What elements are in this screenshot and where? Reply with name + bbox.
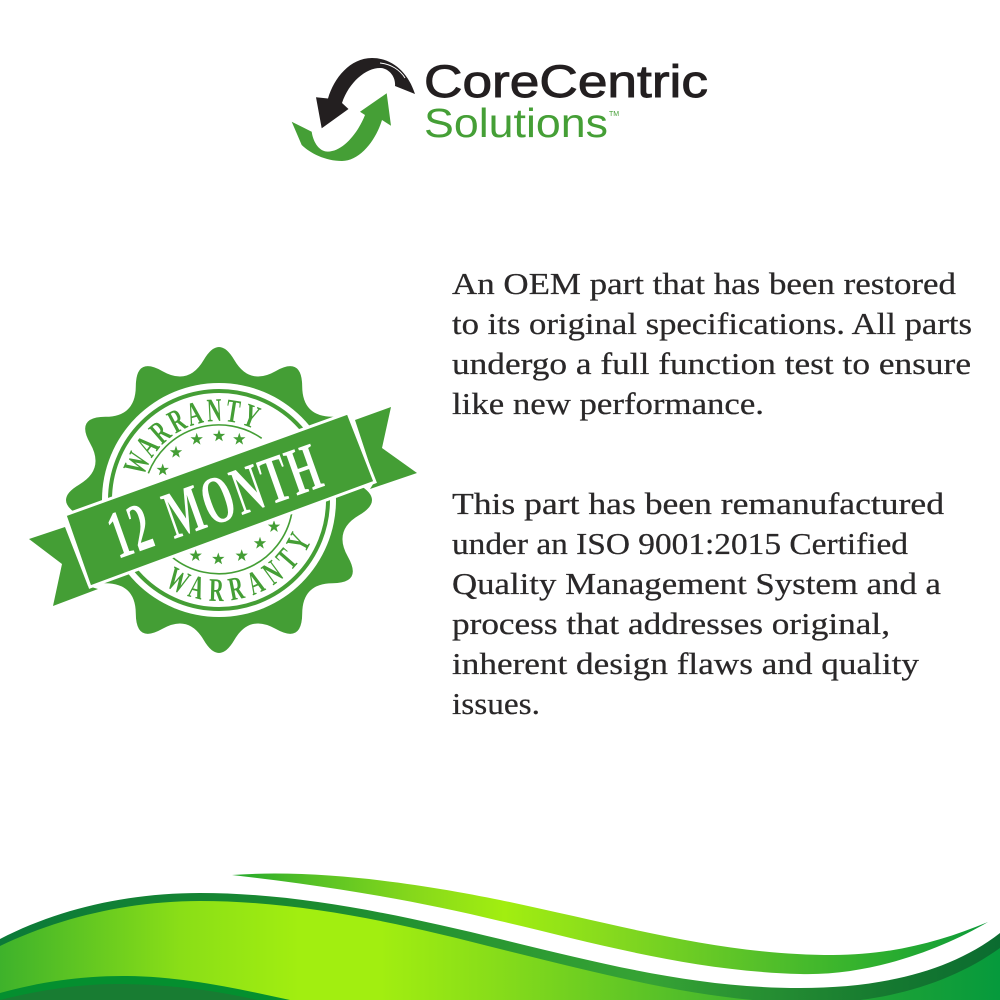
- top curved WARRANTY: W: [116, 447, 158, 480]
- stars: [156, 430, 280, 564]
- paragraph: remanufacturing statement: issues.: [452, 686, 540, 721]
- main wave bright gradient: [0, 901, 1000, 1000]
- paragraph: remanufacturing statement: This part has been remanufactured: [452, 486, 945, 521]
- badge scalloped seal: [66, 347, 372, 653]
- arrow highlight: [380, 63, 405, 78]
- inner arcs: [148, 425, 292, 574]
- top curved WARRANTY: N: [206, 392, 223, 429]
- logo: CoreCentric Solutions: [292, 56, 708, 161]
- icon: black curved arrow: [316, 58, 415, 128]
- bottom curved WARRANTY: W: [161, 560, 195, 601]
- top curved WARRANTY: Y: [238, 397, 265, 436]
- ribbon text: 12 MONTH: 12 MONTH: [98, 427, 332, 573]
- lower dark green band: [0, 976, 290, 1000]
- bottom curved WARRANTY: R: [209, 572, 225, 608]
- main wave dark rim: [0, 893, 1000, 1000]
- ribbon left tail: [29, 527, 98, 606]
- bottom curved WARRANTY: A: [241, 563, 269, 602]
- paragraph: remanufacturing statement: Quality Management System and a: [452, 566, 941, 601]
- top curved WARRANTY: A: [182, 394, 206, 433]
- paragraph: OEM part description: undergo a full function test to ensure: [452, 346, 971, 381]
- paragraph: OEM part description: An OEM part that has been restored: [452, 266, 957, 301]
- lower darkest green band: [0, 984, 257, 1000]
- top curved WARRANTY: R: [143, 413, 178, 451]
- top curved WARRANTY: R: [162, 401, 193, 440]
- paragraph: OEM part description: [452, 266, 972, 421]
- footer wave graphic: [0, 874, 1000, 1000]
- paragraph: OEM part description: like new performance.: [452, 386, 764, 421]
- icon: green curved arrow: [292, 93, 391, 161]
- paragraph: remanufacturing statement: under an ISO 9001:2015 Certified: [452, 526, 909, 561]
- warranty badge: [29, 347, 417, 653]
- paragraph: remanufacturing statement: inherent design flaws and quality: [452, 646, 920, 681]
- bottom curved WARRANTY: N: [256, 554, 289, 591]
- top curved WARRANTY: [116, 392, 265, 480]
- ribbon right tail: [355, 407, 417, 489]
- top curved WARRANTY: T: [223, 392, 243, 430]
- bottom curved WARRANTY: Y: [279, 527, 318, 557]
- upper green swoosh: [232, 874, 988, 974]
- paragraph: remanufacturing statement: process that addresses original,: [452, 606, 890, 641]
- badge green ring: [110, 391, 328, 609]
- top curved WARRANTY: A: [128, 429, 166, 463]
- bottom curved WARRANTY: T: [269, 542, 305, 576]
- logo wordmark: Solutions: Solutions: [424, 100, 608, 146]
- bottom curved WARRANTY: R: [226, 569, 248, 608]
- logo wordmark: CoreCentric: CoreCentric: [424, 56, 708, 107]
- ribbon band: [65, 413, 375, 587]
- bottom curved WARRANTY: A: [185, 568, 208, 607]
- paragraph: remanufacturing statement: [452, 486, 945, 721]
- paragraph: OEM part description: to its original specifications. All parts: [452, 306, 972, 341]
- badge white disc: [102, 383, 336, 617]
- trademark mark: TM: [609, 111, 619, 118]
- bottom curved WARRANTY: [161, 527, 318, 608]
